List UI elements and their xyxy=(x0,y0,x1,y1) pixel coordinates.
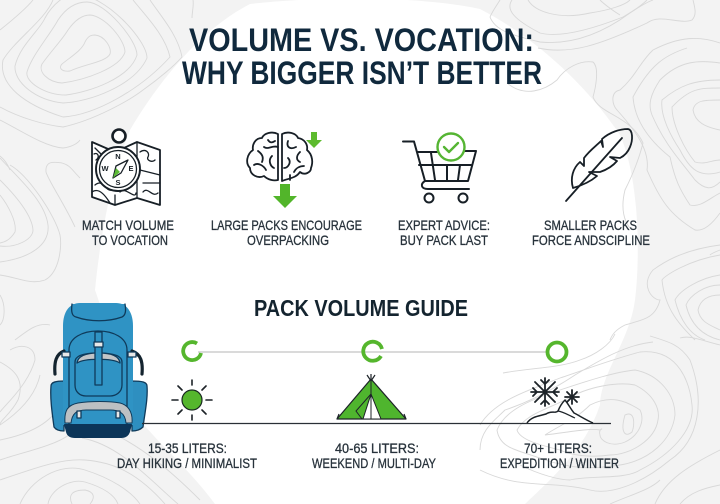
section heading: PACK VOLUME GUIDE xyxy=(254,295,468,321)
label: EXPEDITION / WINTER xyxy=(500,456,619,471)
icon: tent xyxy=(337,374,406,419)
label xyxy=(500,441,619,471)
label xyxy=(398,218,490,248)
label: 15-35 LITERS: xyxy=(148,441,227,456)
label xyxy=(532,218,650,248)
icon: snowflakes and mountain xyxy=(527,378,593,423)
icon: compass over map xyxy=(92,130,160,205)
icon: compass over map: S xyxy=(115,178,121,187)
label xyxy=(211,218,362,248)
icon: shopping cart with check xyxy=(403,134,476,202)
milestone: 15-35 liters xyxy=(117,342,257,471)
label: 70+ LITERS: xyxy=(524,441,592,456)
white central blob xyxy=(95,0,638,504)
label: OVERPACKING xyxy=(247,233,329,248)
label: 40-65 LITERS: xyxy=(335,441,419,456)
label: BUY PACK LAST xyxy=(400,233,488,248)
label: MATCH VOLUME xyxy=(82,218,174,233)
icon: backpack xyxy=(51,303,147,438)
icon: compass over map: N xyxy=(115,152,121,161)
title: WHY BIGGER ISN’T BETTER xyxy=(182,55,542,91)
timeline xyxy=(117,342,619,471)
label: LARGE PACKS ENCOURAGE xyxy=(211,218,362,233)
icon: compass over map: E xyxy=(128,164,134,173)
title: VOLUME VS. VOCATION: xyxy=(189,22,534,58)
milestone: 40-65 liters xyxy=(312,342,436,471)
title xyxy=(182,22,542,91)
icon: compass over map: W xyxy=(101,164,109,173)
panel: smaller packs xyxy=(532,129,650,248)
label: FORCE ANDSCIPLINE xyxy=(532,233,650,248)
label: DAY HIKING / MINIMALIST xyxy=(117,456,257,471)
icon: brain with down arrows xyxy=(247,132,322,208)
panel: large packs encourage overpacking xyxy=(211,132,362,248)
label xyxy=(312,441,436,471)
panel: match volume to vocation xyxy=(82,130,174,248)
label: TO VOCATION xyxy=(92,233,168,248)
label xyxy=(117,441,257,471)
label: WEEKEND / MULTI-DAY xyxy=(312,456,436,471)
label xyxy=(82,218,174,248)
icon: sun xyxy=(172,380,212,420)
label: EXPERT ADVICE: xyxy=(398,218,490,233)
milestone: 70+ liters xyxy=(500,342,619,471)
icon: feather xyxy=(566,129,632,201)
panel: expert advice xyxy=(398,134,490,248)
label: SMALLER PACKS xyxy=(544,218,637,233)
